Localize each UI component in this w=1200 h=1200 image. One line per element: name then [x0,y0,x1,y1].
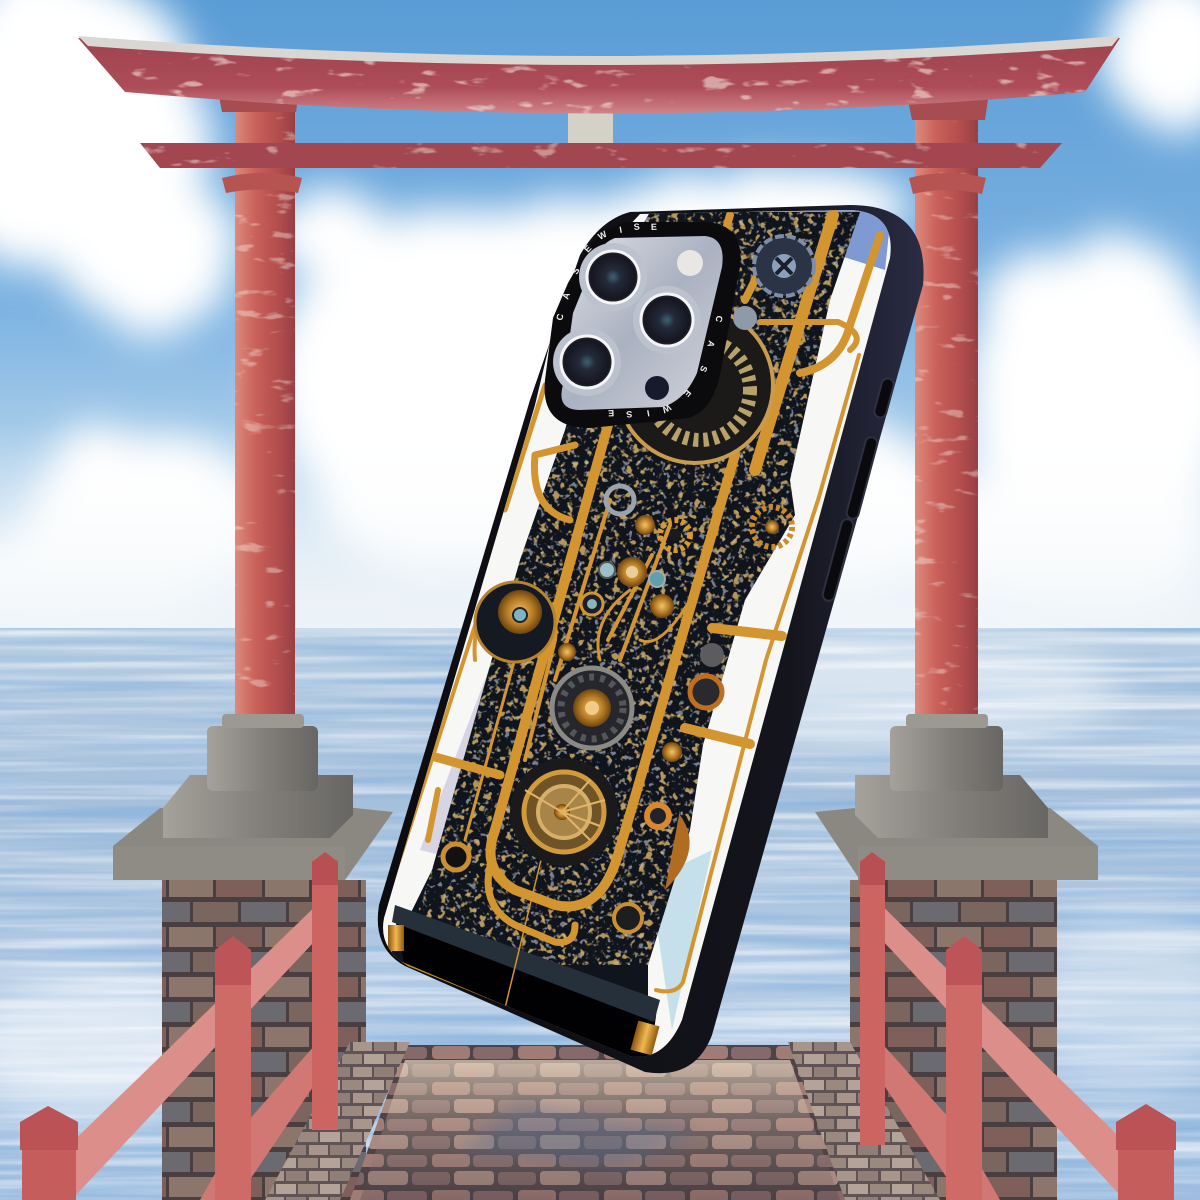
phone back: transparent case with artwork [370,200,900,1070]
lens: right [633,286,701,354]
camera ring [545,222,741,428]
lower black tray [395,918,657,1062]
torii: right pillar [905,85,990,720]
lens: top left [579,243,647,311]
casewise logo, upper left: CASEWISE [554,222,657,322]
central brass wheel [552,668,632,748]
clouds [0,0,1200,640]
torii: left pillar [217,85,302,720]
right stone base [815,714,1098,1200]
blue-steel gear [754,236,814,296]
left stone base [113,714,393,1200]
camera plate [561,236,723,410]
case side buttons [821,377,895,602]
phone case body [378,205,924,1073]
water surface [0,628,1200,1200]
lower large gear [510,758,618,866]
flash [677,250,703,276]
top clockwork dial [617,306,773,463]
casewise logo, lower right: CASEWISE [608,314,725,419]
lens: bottom left [553,328,621,396]
brass feet [388,925,660,1055]
right railing [860,852,1176,1200]
left clock gear [475,582,555,662]
left railing [20,852,338,1200]
machine dark body [385,212,860,1060]
machine gold and steel texture [400,212,860,965]
bottom edge gold line [402,962,514,1009]
torii: top beam [78,36,1120,114]
torii: lower crossbeam [140,143,1062,168]
phone with case [370,200,924,1073]
small brass gears [443,486,792,932]
torii: centre strut [568,104,613,144]
sensor [645,376,669,400]
gold pipes [393,215,880,1008]
sky background [0,0,1200,630]
stone bridge path [265,1042,940,1200]
